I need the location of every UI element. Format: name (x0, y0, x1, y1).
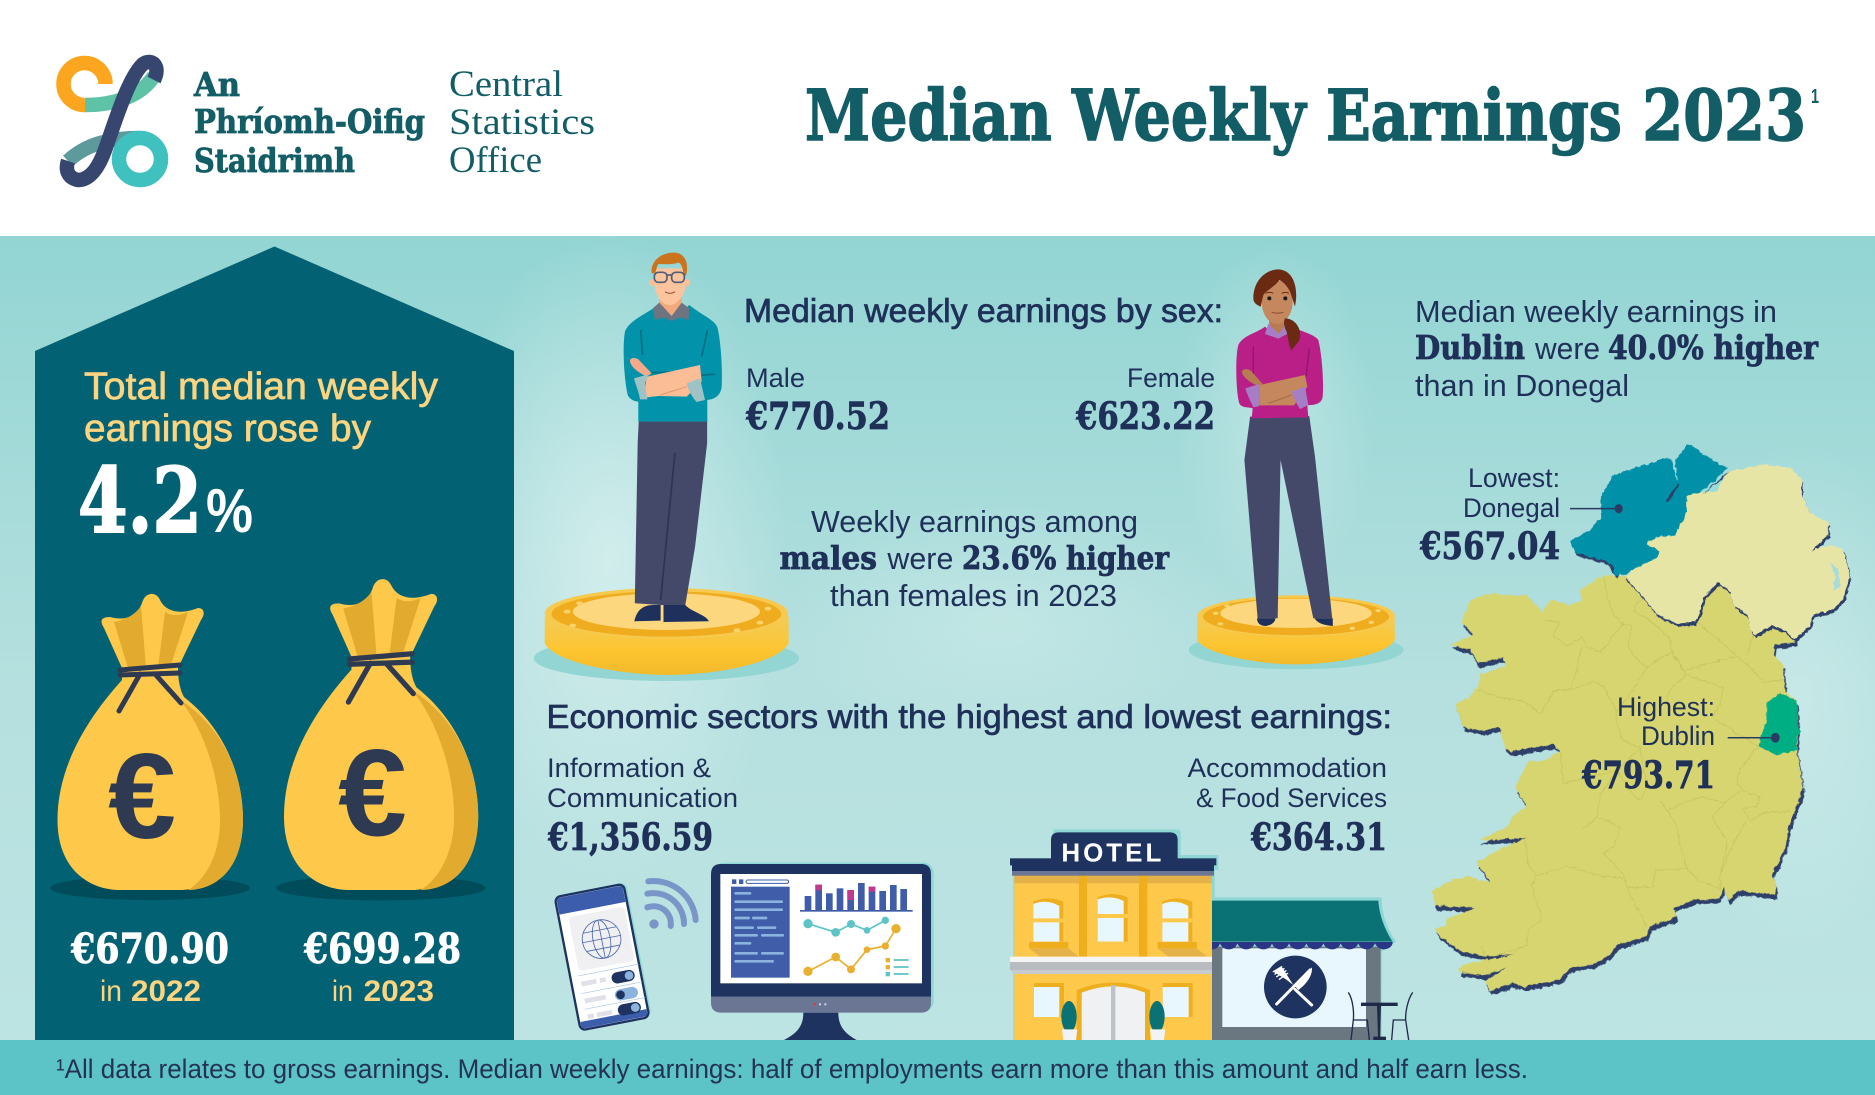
figure: woman on coin (1189, 269, 1403, 669)
logo: Irish name: Staidrimh (194, 141, 355, 180)
icon: hotel (1010, 829, 1218, 1040)
county borders (1478, 575, 1790, 957)
value 2023 (303, 925, 461, 1008)
sector: accommodation and food: €364.31 (1250, 815, 1387, 859)
value 2022: 2022 (131, 975, 201, 1008)
sector: accommodation and food: & Food Services (1196, 783, 1387, 813)
icon: money bag 2022 (50, 594, 250, 900)
Northern Ireland (1625, 464, 1851, 642)
female value (1075, 363, 1215, 438)
sector: information and communication (547, 753, 738, 859)
label: lowest Donegal: Lowest: (1468, 463, 1560, 493)
icon: restaurant (1212, 897, 1413, 1040)
hotel sign text: HOTEL (1061, 838, 1164, 868)
title: 1 (1811, 86, 1819, 108)
logo: Irish name: Phríomh-Oifig (194, 102, 425, 141)
logo: CSO mark (64, 62, 161, 180)
logo: English name: Central (449, 64, 563, 105)
logo: English name (449, 64, 595, 181)
text: Dublin vs Donegal (1415, 294, 1819, 403)
value 2023: €699.28 (303, 925, 461, 973)
sector: information and communication: €1,356.59 (547, 815, 713, 859)
male value: Male (746, 363, 805, 393)
icon: money bag 2023 (276, 579, 486, 900)
value 2022: €670.90 (70, 925, 229, 973)
text: Dublin vs Donegal: were (1534, 331, 1600, 366)
Dublin leader line (1728, 733, 1780, 743)
sector: information and communication: Information & (547, 753, 711, 783)
female value: Female (1127, 363, 1215, 393)
headline text (84, 366, 438, 450)
heading: earnings by sex: Median weekly earnings by sex: (744, 292, 1223, 329)
value 2023: 2023 (364, 975, 434, 1008)
label: highest Dublin (1581, 692, 1715, 797)
value 2022 (70, 925, 229, 1008)
logo: Irish name: An (193, 65, 240, 104)
sector: accommodation and food (1188, 753, 1387, 859)
label: lowest Donegal: Donegal (1463, 493, 1560, 523)
header background (0, 0, 1875, 236)
male value: €770.52 (745, 394, 890, 438)
logo: English name: Statistics (449, 102, 595, 143)
label: highest Dublin: €793.71 (1581, 753, 1715, 797)
main background (0, 230, 1875, 1046)
text: male vs female comparison (780, 504, 1170, 613)
text: male vs female comparison: Weekly earnings among (811, 504, 1138, 539)
text: Dublin vs Donegal: Dublin (1415, 328, 1525, 367)
footnote: ¹All data relates to gross earnings. Median weekly earnings: half of employments earn more than this amount and half earn less. (56, 1054, 1528, 1084)
icon: desktop monitor with charts (711, 863, 934, 1040)
text: Dublin vs Donegal: 40.0% higher (1608, 328, 1819, 367)
logo: Irish name (193, 65, 425, 180)
panel: total earnings house (35, 246, 514, 1040)
text: Dublin vs Donegal: than in Donegal (1415, 368, 1629, 403)
headline text: Total median weekly (84, 366, 438, 408)
text: male vs female comparison: than females in 2023 (830, 578, 1117, 613)
logo: English name: Office (449, 140, 542, 181)
female value: €623.22 (1075, 394, 1215, 438)
heading: economic sectors: Economic sectors with the highest and lowest earnings: (546, 698, 1392, 735)
sector: information and communication: Communication (547, 783, 738, 813)
label: lowest Donegal (1419, 463, 1560, 568)
figure: man on coin (534, 253, 799, 681)
euro symbol: € (108, 728, 176, 864)
Donegal leader line (1570, 504, 1623, 513)
Republic counties (1432, 575, 1803, 991)
label: lowest Donegal: €567.04 (1419, 524, 1560, 568)
headline text: earnings rose by (84, 408, 371, 450)
text: Dublin vs Donegal: Median weekly earnings in (1415, 294, 1777, 329)
icon: smartphone (554, 882, 652, 1030)
text: male vs female comparison: were (886, 541, 953, 576)
map shadow (1433, 579, 1805, 995)
text: male vs female comparison: males (780, 539, 877, 577)
map: Ireland (1432, 445, 1851, 995)
value 2022: in (100, 975, 122, 1008)
figure: 4.2%: % (206, 477, 253, 546)
footer band (0, 1040, 1875, 1095)
figure: 4.2%: 4.2 (78, 448, 202, 554)
icon: wifi (647, 881, 696, 929)
value 2023: in (332, 975, 353, 1008)
sector: accommodation and food: Accommodation (1188, 753, 1387, 783)
label: highest Dublin: Dublin (1641, 721, 1715, 751)
euro symbol: € (338, 724, 407, 862)
text: male vs female comparison: 23.6% higher (962, 539, 1170, 577)
male value (745, 363, 890, 438)
Donegal (lowest) (1570, 445, 1730, 578)
Dublin (highest) (1758, 693, 1802, 755)
label: highest Dublin: Highest: (1617, 692, 1715, 722)
